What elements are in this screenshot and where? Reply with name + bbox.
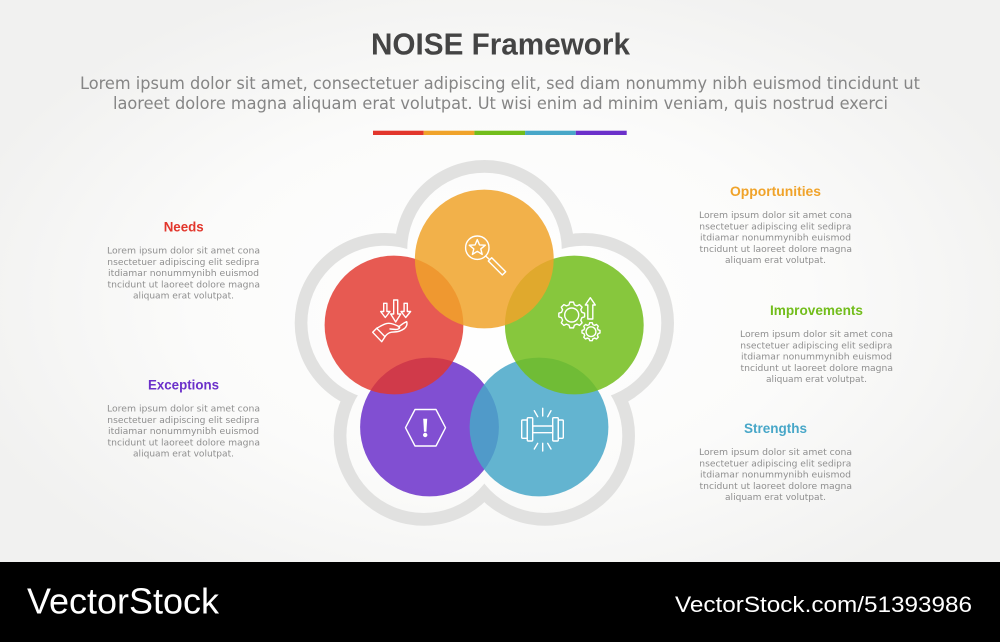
panel: exceptions	[107, 376, 260, 460]
text block: needs	[107, 246, 260, 302]
text block: strengths: aliquam erat volutpat.	[725, 493, 826, 503]
panel: improvements	[740, 302, 893, 385]
text block: strengths: itdiamar nonummynibh euismod	[700, 471, 851, 481]
text block: needs: nsectetuer adipiscing elit sedipra	[107, 258, 259, 268]
up arrow	[585, 298, 595, 319]
circle: exceptions	[360, 358, 499, 496]
heading: opportunities: Opportunities	[730, 183, 821, 199]
title: NOISE Framework	[371, 28, 630, 62]
circle: strengths	[470, 358, 608, 496]
panel: strengths	[699, 420, 852, 503]
text block: needs: Lorem ipsum dolor sit amet cona	[107, 246, 260, 256]
text block: strengths: Lorem ipsum dolor sit amet cona	[699, 448, 852, 458]
text block: needs: aliquam erat volutpat.	[133, 292, 234, 302]
text block: needs: itdiamar nonummynibh euismod	[108, 269, 259, 279]
heading: strengths: Strengths	[744, 420, 807, 436]
text block: improvements	[740, 330, 893, 385]
large gear	[559, 302, 585, 328]
icon: magnifier with star	[466, 236, 506, 275]
text block: exceptions: itdiamar nonummynibh euismod	[108, 427, 259, 437]
icon: gears with up arrow	[559, 298, 600, 341]
text block: improvements: aliquam erat volutpat.	[766, 375, 867, 385]
circle: opportunities	[415, 190, 554, 328]
text block: opportunities: tncidunt ut laoreet dolore magna	[700, 245, 852, 255]
text block: improvements: nsectetuer adipiscing elit sedipra	[740, 341, 892, 351]
text block: exceptions: nsectetuer adipiscing elit sedipra	[107, 416, 259, 426]
subtitle: laoreet dolore magna aliquam erat volutpat. Ut wisi enim ad minim veniam, quis nostrud exerci	[113, 94, 888, 114]
heading: needs: Needs	[164, 218, 204, 234]
text block: needs: tncidunt ut laoreet dolore magna	[108, 280, 260, 290]
icon: hand with down arrows	[373, 300, 411, 342]
colour divider bar	[373, 131, 627, 135]
icon: warning hexagon	[406, 410, 446, 446]
panel: needs	[107, 218, 260, 302]
text block: exceptions: Lorem ipsum dolor sit amet cona	[107, 404, 260, 414]
outer grey flower outline	[285, 150, 685, 535]
heading: improvements: Improvements	[770, 302, 863, 318]
heading: exceptions: Exceptions	[148, 376, 219, 392]
text block: opportunities: nsectetuer adipiscing elit sedipra	[699, 222, 851, 232]
text block: improvements: tncidunt ut laoreet dolore magna	[740, 364, 893, 374]
footer image id: VectorStock.com/51393986	[675, 592, 972, 617]
circle: needs	[325, 256, 463, 394]
icon: dumbbell	[522, 408, 563, 451]
circle: improvements	[505, 256, 644, 394]
text block: opportunities	[699, 211, 852, 266]
footer logo text: VectorStock	[27, 580, 220, 622]
subtitle: Lorem ipsum dolor sit amet, consectetuer adipiscing elit, sed diam nonummy nibh euismod tincidunt ut	[80, 74, 920, 94]
venn diagram circles	[325, 190, 644, 496]
text block: strengths	[699, 448, 852, 503]
text block: exceptions: tncidunt ut laoreet dolore magna	[108, 438, 260, 448]
text block: opportunities: itdiamar nonummynibh euismod	[700, 234, 851, 244]
text block: opportunities: aliquam erat volutpat.	[725, 256, 826, 266]
panel: opportunities	[699, 183, 852, 266]
text block: exceptions: aliquam erat volutpat.	[133, 450, 234, 460]
text block: exceptions	[107, 404, 260, 460]
footer band	[0, 562, 1000, 642]
text block: strengths: tncidunt ut laoreet dolore magna	[700, 482, 852, 492]
text block: opportunities: Lorem ipsum dolor sit amet cona	[699, 211, 852, 221]
small gear	[582, 323, 600, 341]
text block: improvements: Lorem ipsum dolor sit amet cona	[740, 330, 893, 340]
text block: improvements: itdiamar nonummynibh euismod	[741, 353, 892, 363]
text block: strengths: nsectetuer adipiscing elit sedipra	[699, 459, 851, 469]
subtitle	[80, 74, 920, 114]
